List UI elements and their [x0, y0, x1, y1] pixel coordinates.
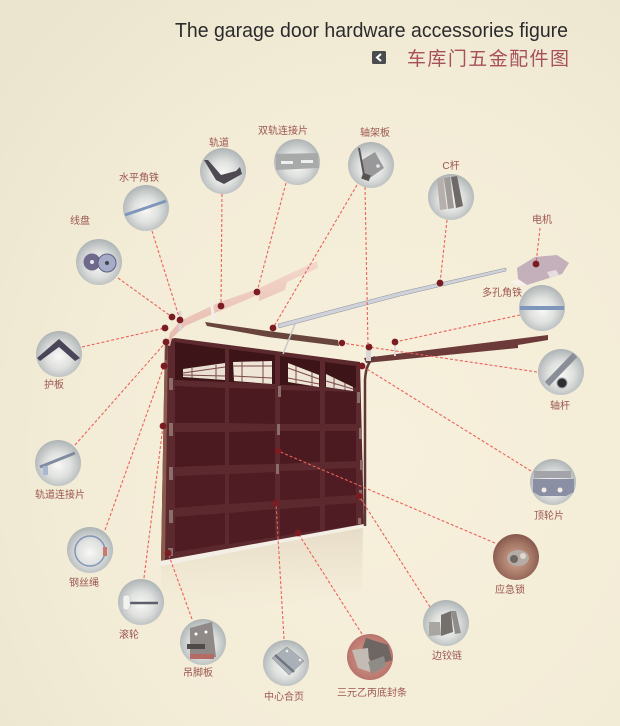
label: 水平角铁 [119, 171, 159, 184]
label: 吊脚板 [183, 666, 213, 679]
door hinges [168, 378, 363, 556]
part: 线盘 [70, 214, 122, 285]
leader line: 水平角铁 [152, 231, 183, 323]
part: 顶轮片 [530, 459, 576, 522]
leader line: 中心合页 [273, 500, 284, 639]
icon: top roller plate [533, 471, 574, 496]
label: 应急锁 [495, 583, 525, 596]
left horizontal track [166, 261, 318, 360]
chinese subtitle: 车库门五金配件图 [407, 48, 569, 70]
label: 滚轮 [119, 628, 139, 641]
leader line: 轴架板 to bracket [365, 187, 368, 347]
part: 轴杆 [538, 349, 584, 412]
leader line: 吊脚板 [165, 550, 192, 619]
label: 轨道 [209, 136, 229, 149]
icon: wire rope [75, 536, 107, 566]
door left edge [161, 340, 168, 562]
leader line: 滚轮 [144, 423, 166, 578]
part: 应急锁 [493, 534, 539, 596]
torsion spring bar [205, 322, 339, 346]
icon: track channel [204, 160, 242, 184]
part: 双轨连接片 [258, 124, 320, 185]
part: 轨道连接片 [35, 440, 85, 501]
part: 钢丝绳 [67, 527, 113, 589]
leader line: C杆 [437, 220, 447, 286]
label: 中心合页 [264, 690, 304, 703]
leader line: 线盘 [118, 278, 175, 320]
icon: back arrow badge [372, 51, 386, 64]
icon: cable drums [84, 254, 116, 272]
arm bracket [283, 324, 295, 354]
leader line: 轨道 [218, 194, 224, 309]
part: 多孔角铁 [482, 285, 565, 331]
icon: center hinge [272, 647, 304, 675]
leader line: 边铰链 [356, 493, 430, 607]
leader line: 电机 [533, 228, 540, 267]
label: 边铰链 [432, 649, 462, 662]
part: 三元乙丙底封条 [337, 634, 407, 699]
door reflection [161, 528, 363, 625]
leader line: 钢丝绳 [105, 363, 167, 530]
leader line: 多孔角铁 [392, 315, 520, 345]
icon: angle iron [125, 201, 166, 215]
label: 线盘 [70, 214, 90, 227]
opener motor [510, 255, 569, 286]
leader line: 三元乙丙底封条 [295, 530, 362, 634]
icon: guard plate [37, 339, 80, 361]
right horizontal track [364, 335, 548, 526]
part: 护板 [36, 331, 82, 391]
leader line: 双轨连接片 [254, 183, 286, 295]
leader line: 应急锁 [275, 448, 495, 543]
garage door assembly [160, 338, 364, 566]
label: 多孔角铁 [482, 286, 522, 299]
icon: bottom bracket [187, 622, 216, 659]
part: 轴架板 [348, 126, 394, 188]
door windows [183, 361, 353, 391]
icon: c-rods [437, 176, 463, 210]
label: C杆 [442, 160, 460, 172]
label: 轴杆 [550, 399, 570, 412]
label: 双轨连接片 [258, 124, 308, 137]
icon: seal strip [352, 638, 392, 674]
label: 顶轮片 [534, 509, 564, 522]
label: 护板 [44, 378, 64, 391]
door slab [161, 338, 364, 562]
door bottom seal [160, 524, 364, 566]
icon: perforated angle [520, 306, 564, 310]
icon: shaft bracket [359, 148, 384, 181]
label: 轴架板 [360, 126, 390, 139]
leader line: 护板 [82, 325, 168, 347]
icon: double-track connector [276, 153, 319, 170]
part: 水平角铁 [119, 171, 169, 231]
title: The garage door hardware accessories figure [175, 20, 568, 42]
part: 电机: 电机 [532, 213, 552, 226]
leader line: 轴杆 [339, 340, 537, 372]
door panels [175, 342, 356, 552]
leader line: 顶轮片 [359, 363, 531, 471]
icon: track connector [40, 453, 75, 475]
part: 中心合页 [263, 640, 309, 703]
part: 轨道 [200, 136, 246, 194]
part: 滚轮 [118, 579, 164, 641]
part: C杆 [428, 160, 474, 220]
label: 钢丝绳 [69, 576, 99, 589]
part: 边铰链 [423, 600, 469, 662]
icon: emergency lock [507, 550, 529, 566]
opener rail [278, 268, 506, 328]
label: 三元乙丙底封条 [337, 686, 407, 699]
label: 轨道连接片 [35, 488, 85, 501]
leader line: 轨道连接片 [75, 339, 169, 445]
icon: roller [123, 595, 158, 610]
icon: shaft [547, 355, 575, 388]
part: 吊脚板 [180, 619, 226, 679]
leader line: 轴架板 to spring [270, 185, 357, 331]
icon: side hinge [429, 611, 461, 636]
